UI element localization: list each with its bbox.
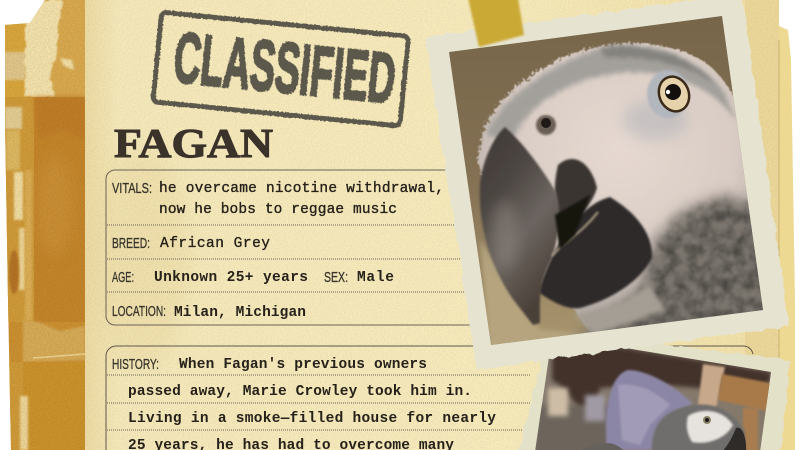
cere: [555, 159, 597, 245]
panel: history: HISTORY:: [112, 357, 159, 373]
panel: history: passed away, Marie Crowley took him in.: [128, 384, 472, 400]
grey parrot body: [587, 443, 623, 450]
name heading: Fagan: FAGAN: [114, 120, 273, 166]
panel: vitals table: Milan, Michigan: [174, 305, 306, 321]
beak: [722, 428, 746, 450]
eye patch: [623, 100, 687, 140]
left folder binding strip: [0, 0, 85, 450]
lower beak: [538, 197, 652, 308]
panel: vitals table: Unknown 25+ years: [154, 270, 308, 286]
folder back tab: [730, 0, 795, 450]
panel: vitals table: [106, 170, 606, 325]
panel: vitals table: he overcame nicotine withdrawal,: [159, 181, 444, 197]
photo frame: [518, 330, 790, 450]
white face patch: [687, 411, 733, 443]
panel: vitals table: Male: [357, 270, 394, 286]
panel: vitals table: SEX:: [324, 270, 348, 286]
panel: vitals table: AGE:: [112, 270, 134, 286]
tape: [468, 0, 524, 47]
panel: history: [106, 346, 753, 450]
panel: vitals table: BREED:: [112, 236, 150, 252]
panel: vitals table: VITALS:: [112, 181, 152, 197]
crown feathers: [486, 46, 736, 138]
eye: [703, 416, 711, 424]
neck feathers: [574, 188, 763, 334]
lavender cloth: [606, 370, 693, 450]
panel: vitals table: now he bobs to reggae music: [159, 202, 397, 218]
panel: vitals table: LOCATION:: [112, 304, 166, 320]
panel: history: Living in a smoke—filled house for nearly: [128, 411, 496, 427]
stamp: classified: CLASSIFIED: [170, 19, 399, 119]
nostril: [536, 115, 556, 135]
stamp: classified: [153, 12, 409, 126]
photo frame: [425, 0, 789, 370]
eye: [658, 75, 690, 113]
panel: vitals table: African Grey: [160, 236, 270, 252]
panel: history: When Fagan's previous owners: [179, 357, 427, 373]
photo: parrot with cloth: [518, 344, 790, 450]
photo: parrot close-up: [425, 0, 789, 370]
upper beak: [480, 127, 559, 325]
head: [478, 43, 775, 336]
